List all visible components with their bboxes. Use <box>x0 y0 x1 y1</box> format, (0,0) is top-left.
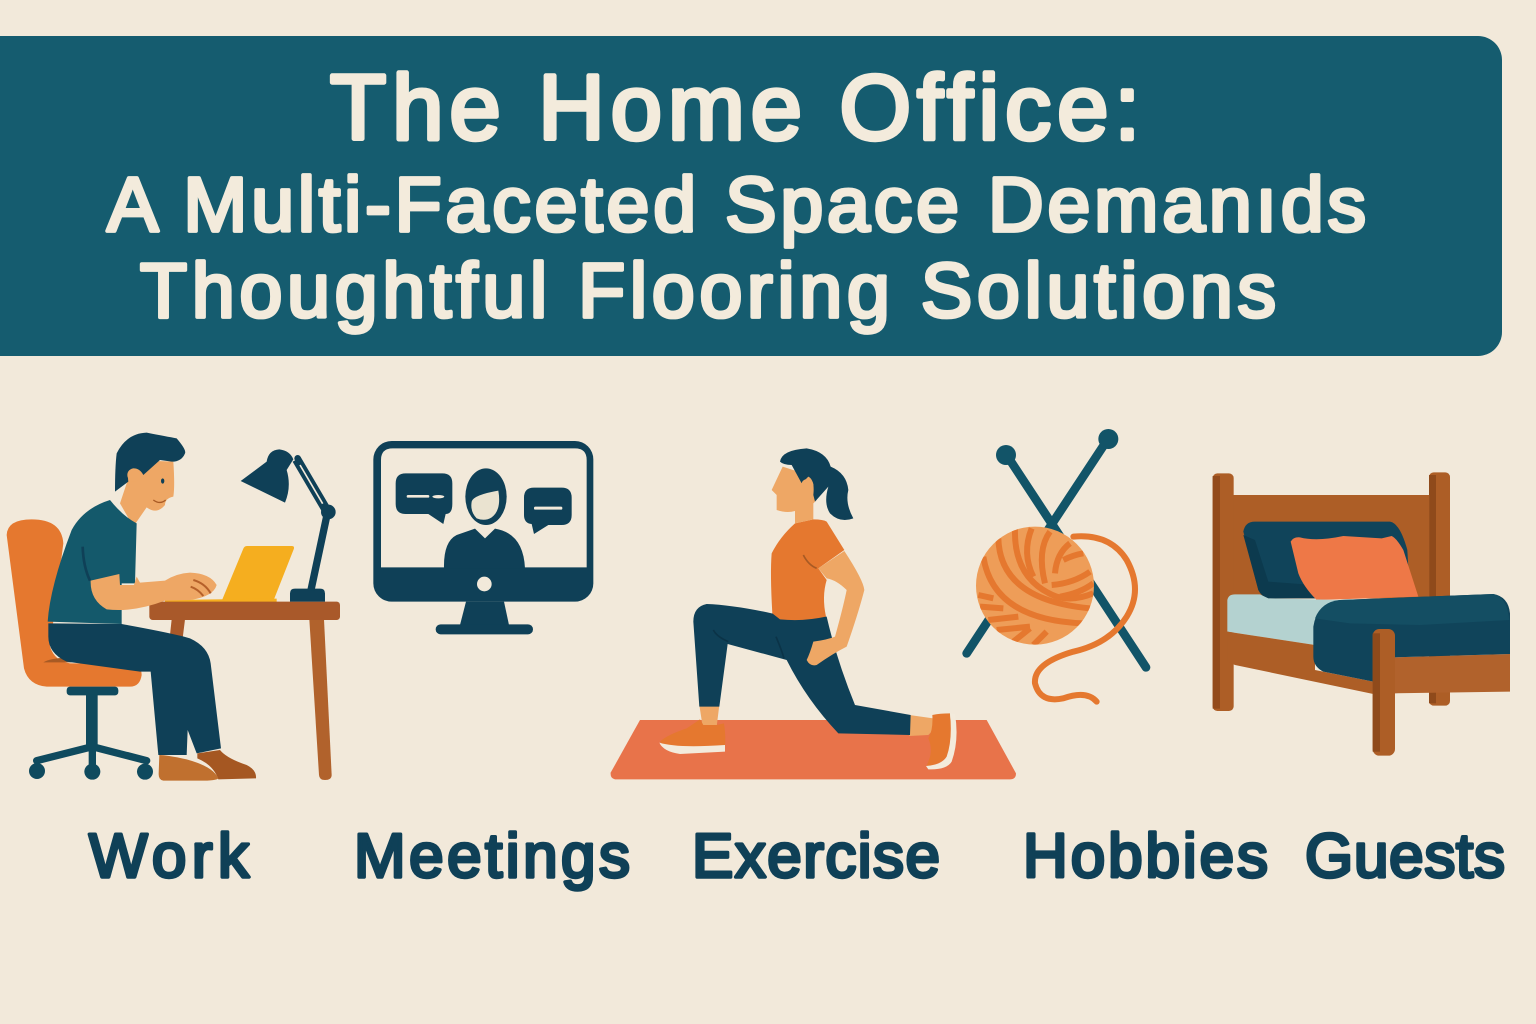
title line 3: Thoughtful Flooring Solutions <box>140 248 1276 334</box>
icon: yarn ball and knitting needles <box>967 429 1146 702</box>
title line 1: The Home Office: <box>330 57 1140 159</box>
icon: guest bed <box>1213 472 1510 756</box>
label: Guests: Guests <box>1305 822 1505 891</box>
icon: man working at desk <box>7 433 340 781</box>
label: Work: Work <box>89 822 250 891</box>
label: Exercise: Exercise <box>692 822 940 891</box>
label: Hobbies: Hobbies <box>1023 822 1268 891</box>
label: Meetings: Meetings <box>354 822 630 891</box>
title banner <box>0 36 1502 356</box>
icon: video meeting monitor <box>373 441 593 634</box>
title line 2: A Multi-Faceted Space Demanıds <box>107 162 1366 248</box>
icon: woman doing a lunge on a mat <box>611 448 1016 779</box>
